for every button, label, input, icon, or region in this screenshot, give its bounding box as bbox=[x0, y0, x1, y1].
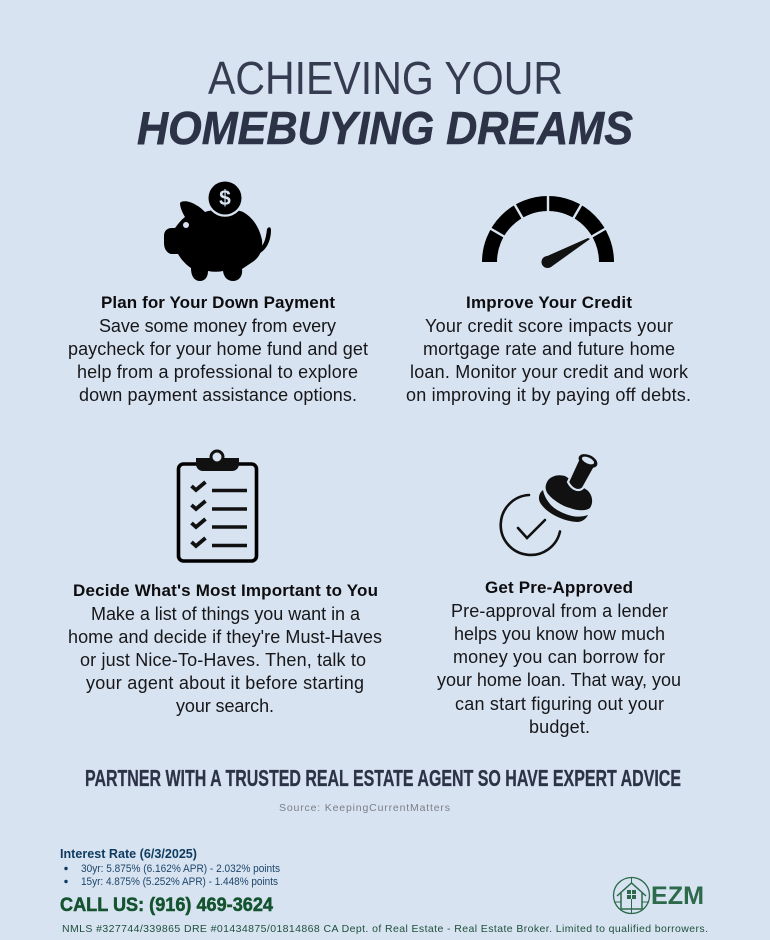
text block: helps you know how much bbox=[454, 624, 665, 644]
text block: Pre-approval from a lender bbox=[451, 601, 668, 621]
panel: improve your credit bbox=[406, 190, 691, 405]
text block: your home loan. That way, you bbox=[437, 670, 681, 690]
text block: Make a list of things you want in a bbox=[91, 604, 361, 624]
text block: loan. Monitor your credit and work bbox=[410, 362, 689, 382]
text block: help from a professional to explore bbox=[77, 362, 358, 382]
icon: piggy bank bbox=[164, 179, 271, 281]
logo: EZM: EZM bbox=[651, 882, 704, 910]
text block: Save some money from every bbox=[99, 316, 336, 336]
text block: Your credit score impacts your bbox=[425, 316, 673, 336]
panel: decide what's most important bbox=[68, 451, 382, 716]
text block: down payment assistance options. bbox=[79, 385, 357, 405]
text block: paycheck for your home fund and get bbox=[68, 339, 368, 359]
heading: Plan for Your Down Payment bbox=[101, 293, 335, 312]
text block: mortgage rate and future home bbox=[423, 339, 675, 359]
text block: money you can borrow for bbox=[453, 647, 665, 667]
panel: get pre-approved bbox=[437, 451, 681, 737]
heading: Decide What's Most Important to You bbox=[73, 581, 378, 600]
text block: on improving it by paying off debts. bbox=[406, 385, 691, 405]
heading: Get Pre-Approved bbox=[485, 578, 633, 597]
text block bbox=[406, 316, 691, 405]
text block: or just Nice-To-Haves. Then, talk to bbox=[80, 650, 366, 670]
source note: Source: KeepingCurrentMatters bbox=[279, 802, 450, 814]
text block bbox=[437, 601, 681, 737]
title bbox=[137, 52, 633, 154]
text block: your agent about it before starting bbox=[86, 673, 364, 693]
call us phone number: CALL US: (916) 469-3624 bbox=[60, 895, 273, 916]
interest rate block: Interest Rate (6/3/2025) bbox=[60, 847, 197, 861]
interest rate block: 15yr: 4.875% (5.252% APR) - 1.448% points bbox=[81, 876, 278, 888]
interest rate block bbox=[60, 847, 280, 888]
icon: clipboard checklist bbox=[178, 451, 256, 561]
panel: plan for your down payment bbox=[68, 179, 368, 405]
icon: credit gauge bbox=[486, 190, 610, 312]
text block: budget. bbox=[529, 717, 590, 737]
title: HOMEBUYING DREAMS bbox=[137, 102, 633, 154]
text block bbox=[68, 316, 368, 405]
text block bbox=[68, 604, 382, 716]
interest rate block: 30yr: 5.875% (6.162% APR) - 2.032% points bbox=[81, 863, 280, 875]
logo: EZM bbox=[614, 878, 704, 914]
icon: approval stamp bbox=[501, 451, 600, 555]
text block: your search. bbox=[176, 696, 274, 716]
licensing disclaimer: NMLS #327744/339865 DRE #01434875/01814868 CA Dept. of Real Estate - Real Estate Broker. Limited to qualified borrowers. bbox=[62, 923, 708, 935]
text block: home and decide if they're Must-Haves bbox=[68, 627, 382, 647]
title: ACHIEVING YOUR bbox=[208, 52, 563, 104]
heading: Improve Your Credit bbox=[466, 293, 632, 312]
icon: piggy bank: $ bbox=[219, 187, 231, 210]
text block: can start figuring out your bbox=[455, 694, 664, 714]
